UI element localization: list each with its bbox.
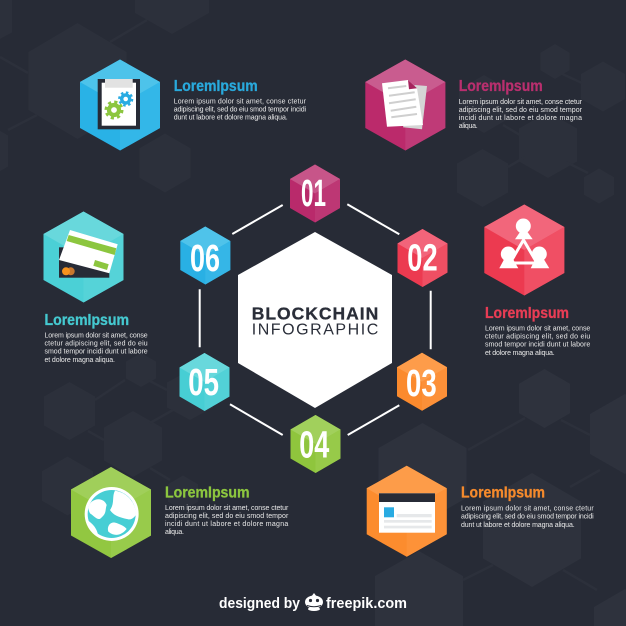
- node 05: 05: [188, 362, 219, 404]
- node 02: [398, 229, 448, 287]
- body text: Lorem ipsum dolor sit amet, conse ctetur: [459, 99, 583, 106]
- body text: ctetur adipiscing elit, sed do eiu: [485, 334, 590, 340]
- node 03: 03: [406, 363, 437, 405]
- body text: aliqua.: [459, 123, 478, 130]
- icon: freepik mascot: [305, 593, 323, 611]
- node 06: [180, 226, 230, 284]
- panel: blue clipboard: [80, 60, 307, 150]
- body text: adipiscing elit, sed do eiu smod tempor: [165, 513, 289, 520]
- subtitle: infographic: INFOGRAPHIC: [252, 322, 378, 339]
- panel: green globe: [71, 467, 289, 558]
- icon: globe: [71, 467, 151, 558]
- body text: smod tempor incidi dunt ut labore: [485, 342, 590, 348]
- body text: ctetur adipiscing elit, sed do eiu: [44, 340, 148, 348]
- footer credit: freepik.com: [326, 596, 407, 612]
- heading: LoremIpsum: [44, 312, 129, 329]
- panel: pink documents: [365, 60, 583, 150]
- connector lines: [200, 204, 431, 435]
- body text: smod tempor incidi dunt ut labore: [44, 348, 148, 356]
- node 02: 02: [407, 238, 438, 280]
- node 04: [290, 415, 340, 473]
- node 01: [290, 164, 340, 222]
- body text: Lorem ipsum dolor sit amet, conse: [44, 332, 148, 340]
- node 04: 04: [299, 425, 329, 467]
- body text: et dolore magna aliqua.: [485, 350, 555, 357]
- body text: [165, 505, 289, 536]
- body text: Lorem ipsum dolor sit amet, conse ctetur: [165, 505, 289, 512]
- footer credit: [219, 593, 407, 612]
- body text: incidi dunt ut labore et dolore magna: [165, 521, 288, 528]
- heading: LoremIpsum: [165, 484, 250, 502]
- heading: LoremIpsum: [459, 78, 543, 95]
- title: blockchain: BLOCKCHAIN: [252, 303, 378, 323]
- body text: [485, 326, 590, 357]
- node 01: 01: [301, 173, 326, 215]
- body text: dunt ut labore et dolore magna aliqua.: [174, 114, 288, 122]
- body text: [461, 506, 594, 529]
- node 05: [180, 353, 230, 411]
- node 06: 06: [190, 238, 220, 280]
- node 03: [397, 353, 447, 411]
- heading: LoremIpsum: [174, 78, 258, 95]
- body text: dunt ut labore et dolore magna aliqua.: [461, 522, 575, 529]
- body text: Lorem ipsum dolor sit amet, conse ctetur: [174, 98, 307, 106]
- icon: documents: [365, 60, 445, 150]
- body text: [459, 99, 583, 130]
- body text: Lorem ipsum dolor sit amet, conse ctetur: [461, 506, 594, 512]
- panel: orange window: [367, 466, 594, 557]
- icon: connected people: [484, 204, 564, 296]
- body text: et dolore magna aliqua.: [44, 357, 115, 364]
- central hexagon: [238, 232, 392, 408]
- icon: browser window: [367, 466, 447, 557]
- heading: LoremIpsum: [461, 484, 545, 502]
- panel: teal cards: [44, 212, 148, 364]
- body text: aliqua.: [165, 529, 184, 536]
- body text: Lorem ipsum dolor sit amet, conse: [485, 326, 590, 332]
- body text: [44, 332, 148, 364]
- body text: adipiscing elit, sed do eiu smod tempor incidi: [461, 514, 594, 520]
- panel: red network: [484, 204, 590, 357]
- body text: incidi dunt ut labore et dolore magna: [459, 115, 582, 122]
- heading: LoremIpsum: [485, 305, 569, 322]
- body text: adipiscing elit, sed do eiu smod tempor incidi: [174, 106, 306, 114]
- body text: [174, 98, 307, 122]
- icon: credit cards: [44, 212, 124, 302]
- icon: clipboard with gears: [80, 60, 160, 150]
- footer credit: designed by: [219, 596, 300, 612]
- body text: adipiscing elit, sed do eiu smod tempor: [459, 107, 583, 114]
